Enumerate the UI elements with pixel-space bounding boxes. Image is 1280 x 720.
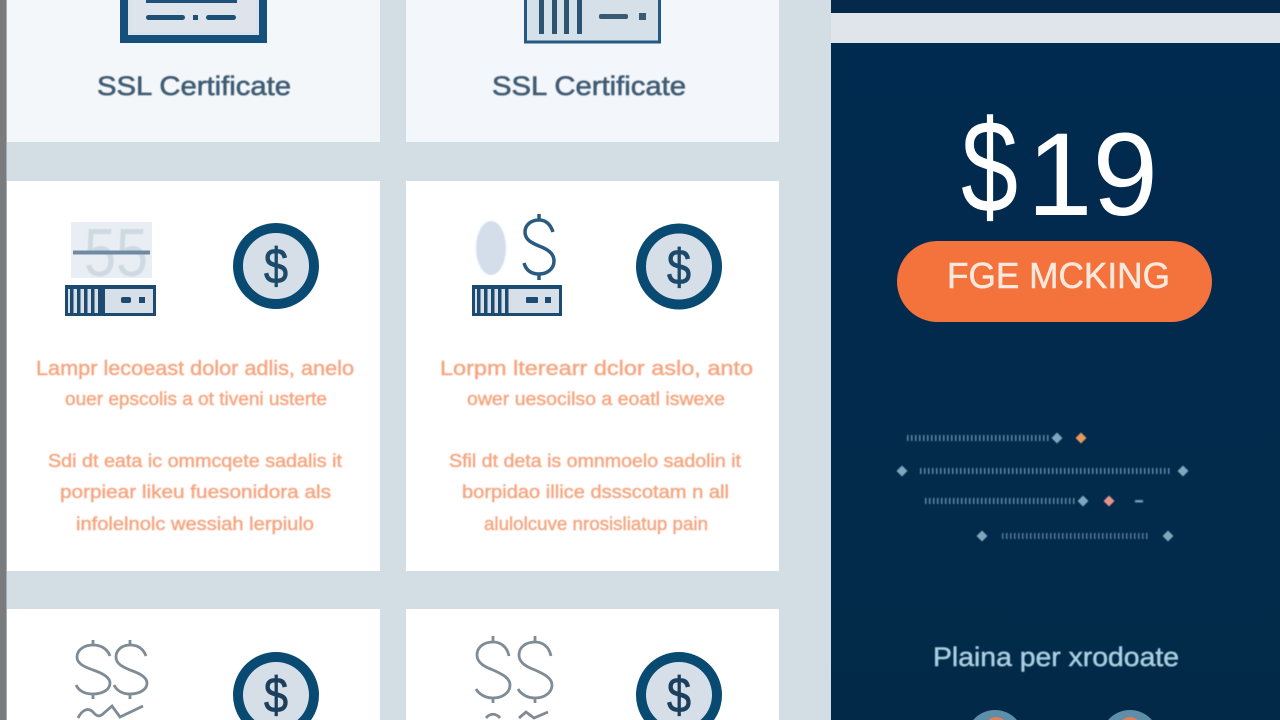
panel: hosting plan card, right	[406, 181, 779, 571]
text block: description: Sfil dt deta is omnmoelo sadolin it	[449, 451, 741, 471]
icon: dollar coin: $	[264, 238, 288, 294]
panel: hosting plan card, left	[7, 181, 380, 571]
feature list: dotted rows	[896, 432, 1188, 542]
icon: thin dollars with zigzag	[76, 640, 147, 718]
text block: description: porpiear likeu fuesonidora als	[60, 482, 331, 502]
text block: description: Lorpm lterearr dclor aslo, anto	[440, 358, 753, 380]
text block: description	[36, 358, 354, 534]
icon: server certificate	[524, 0, 661, 44]
icon: thin dollars with zigzag	[476, 636, 552, 718]
text block: description: Sdi dt eata ic ommcqete sadalis it	[48, 451, 342, 471]
panel: top navy strip	[831, 0, 1280, 43]
icon: faded dollars on server	[65, 215, 156, 316]
button: FGE MCKING: FGE MCKING	[947, 255, 1170, 296]
icon: dollar coin	[238, 228, 314, 304]
icon: dollar coin	[636, 652, 722, 720]
panel: SSL certificate card, right	[406, 0, 779, 142]
icon: dollars on server	[472, 214, 562, 316]
icon: certificate frame	[120, 0, 267, 43]
text block: description: infolelnolc wessiah lerpiulo	[76, 514, 314, 534]
panel: SSL certificate card, left	[7, 0, 380, 142]
avatar: right	[1108, 710, 1152, 720]
text block: description: ower uesocilso a eoatl iswexe	[467, 389, 725, 409]
label: SSL Certificate: SSL Certificate	[97, 71, 291, 101]
price: $19: $	[961, 93, 1018, 240]
text block: description: alulolcuve nrosisliatup pain	[484, 514, 708, 534]
label: SSL Certificate: SSL Certificate	[492, 71, 686, 101]
icon: dollar coin	[233, 652, 319, 720]
icon: dollar coin: $	[667, 239, 691, 295]
text block: description	[440, 358, 753, 534]
avatar: left	[973, 710, 1017, 720]
text block: description: ouer epscolis a ot tiveni usterte	[65, 389, 327, 409]
text block: description: borpidao illice dssscotam n all	[462, 482, 729, 502]
icon: dollar coin	[641, 228, 717, 304]
price: $19: 19	[1027, 109, 1158, 241]
icon: faded dollars on server: 55	[84, 215, 148, 291]
panel: pricing	[831, 43, 1280, 720]
button: FGE MCKING	[897, 241, 1212, 322]
text block: description: Lampr lecoeast dolor adlis, anelo	[36, 358, 354, 380]
panel: lower card, right	[406, 609, 779, 720]
price: $19	[961, 93, 1158, 241]
caption: Plaina per xrodoate: Plaina per xrodoate	[933, 642, 1179, 672]
panel: lower card, left	[7, 609, 380, 720]
